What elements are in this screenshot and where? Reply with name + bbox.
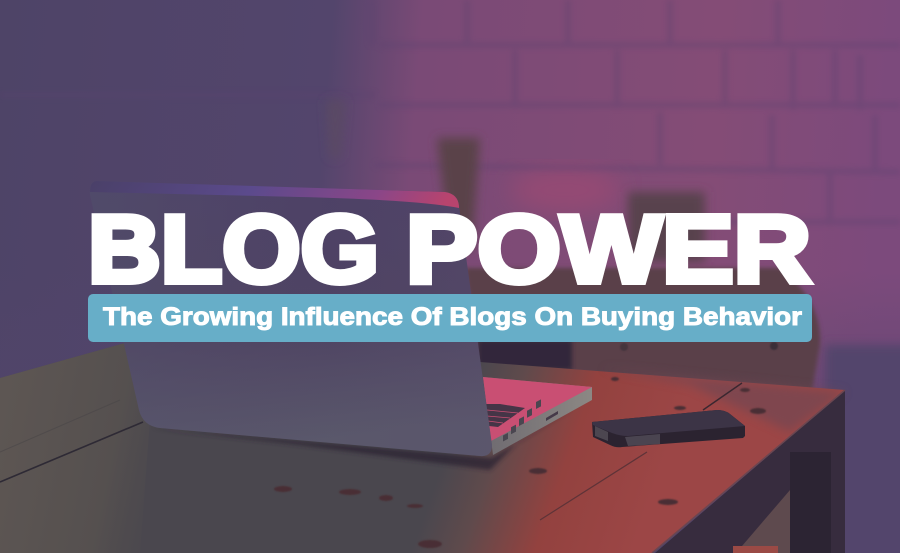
laptop base xyxy=(483,377,592,455)
laptop xyxy=(90,181,592,470)
blurred objects on shelf xyxy=(326,100,705,262)
subtitle text: The Growing Influence Of Blogs On Buying Behavior xyxy=(103,303,802,331)
laptop shadow xyxy=(150,408,575,470)
smartphone xyxy=(592,410,745,447)
laptop lid xyxy=(90,181,492,456)
title xyxy=(88,196,811,303)
title: BLOG xyxy=(88,196,379,303)
table frame and leg xyxy=(652,390,845,553)
blurred chair behind table xyxy=(465,268,820,392)
subtitle banner xyxy=(88,294,812,342)
title: POWER xyxy=(406,196,811,303)
table top xyxy=(0,343,845,553)
